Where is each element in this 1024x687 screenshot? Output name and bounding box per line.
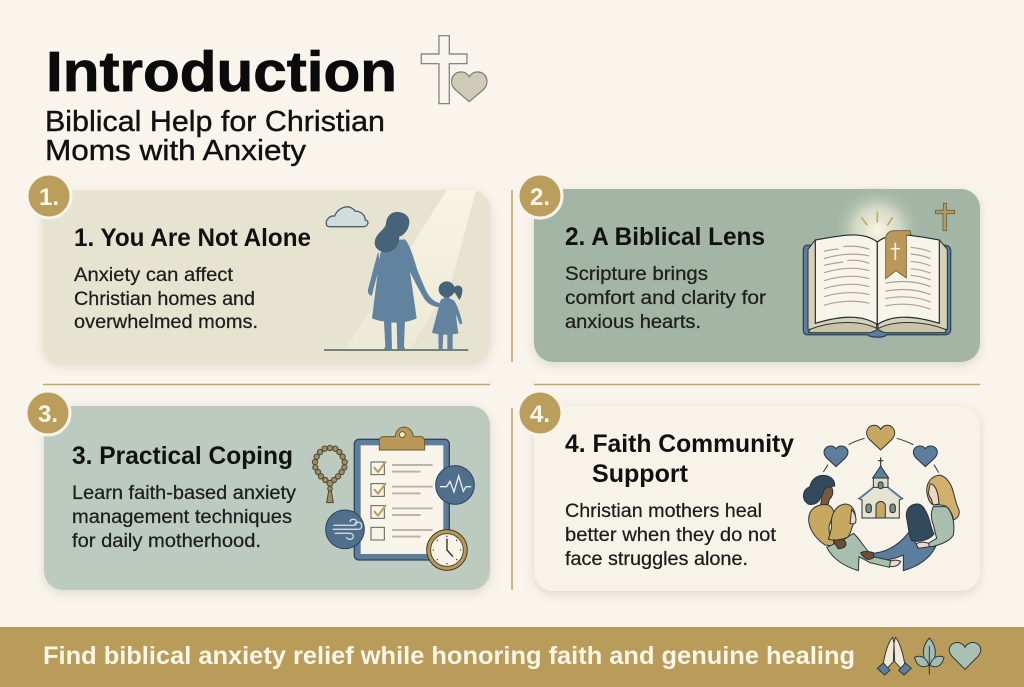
icon: cross and heart (421, 36, 487, 104)
icon: mother and child silhouette (324, 207, 468, 350)
heading: 3. Practical Coping (72, 442, 293, 470)
icon: open bible (803, 185, 955, 337)
clock (427, 530, 467, 570)
body text: Anxiety can affect (74, 264, 234, 286)
body text: anxious hearts. (565, 311, 701, 333)
woman left back (803, 475, 835, 546)
clipboard (354, 427, 449, 560)
panel: 2 A Biblical Lens (534, 185, 980, 362)
badge: 3: 3. (38, 401, 58, 428)
footer banner (0, 627, 1024, 687)
panel: 1 You Are Not Alone (43, 190, 490, 363)
heading: Support (592, 460, 689, 488)
body text: overwhelmed moms. (74, 311, 258, 333)
subtitle: Moms with Anxiety (45, 135, 307, 167)
body text: face struggles alone. (565, 548, 748, 570)
body text: Christian mothers heal (565, 500, 762, 522)
pulse badge (436, 466, 474, 504)
body text: Christian homes and (74, 288, 255, 310)
woman right front (873, 504, 936, 571)
heading: 2. A Biblical Lens (565, 223, 765, 251)
icon: church, hearts and circle of women (803, 425, 959, 571)
breath badge (326, 510, 364, 549)
badge: 1 (27, 174, 71, 218)
woman left front (827, 504, 891, 571)
badge: 4: 4. (530, 401, 550, 428)
checklist (371, 461, 433, 540)
light beam (345, 190, 476, 350)
title: Introduction (46, 40, 397, 104)
badge: 4 (518, 391, 562, 435)
hearts and arc (823, 425, 939, 473)
subtitle (45, 106, 385, 167)
body text: comfort and clarity for (565, 287, 767, 309)
panel: 3 Practical Coping (44, 406, 490, 590)
church (859, 457, 903, 518)
body text (565, 263, 767, 333)
badge: 3 (26, 391, 70, 435)
body text (72, 482, 296, 552)
body text: for daily motherhood. (72, 530, 261, 552)
badge: 2 (518, 174, 562, 218)
body text: better when they do not (565, 524, 777, 546)
heading: 1. You Are Not Alone (74, 224, 311, 252)
badge: 2: 2. (530, 184, 550, 211)
body text: Scripture brings (565, 263, 708, 285)
icon: praying hands, plant, heart (877, 637, 981, 675)
heading: 4. Faith Community (565, 430, 794, 458)
panel: 4 Faith Community Support (534, 406, 980, 591)
badge: 1: 1. (39, 184, 59, 211)
rosary (312, 445, 347, 503)
heading (565, 430, 794, 488)
body text: management techniques (72, 506, 292, 528)
subtitle: Biblical Help for Christian (45, 106, 385, 138)
body text (565, 500, 777, 570)
body text (74, 264, 258, 333)
footer text: Find biblical anxiety relief while honoring faith and genuine healing (43, 642, 855, 670)
body text: Learn faith-based anxiety (72, 482, 296, 504)
icon: clipboard checklist with rosary, pulse, breath and clock (312, 427, 474, 570)
woman right back (916, 475, 959, 549)
